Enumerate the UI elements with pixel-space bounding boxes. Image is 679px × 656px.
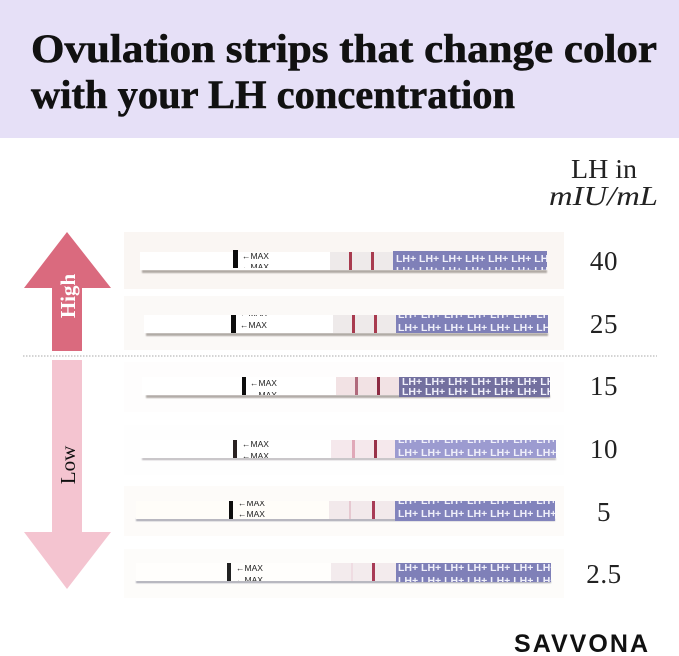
strip row: LH 5: LH+ LH+ LH+ LH+ LH+ LH+ LH+ LH+ [398, 508, 579, 520]
value: 5: 5 [597, 497, 611, 527]
strip row: LH 25 [144, 315, 550, 338]
value: 15: 15 [590, 371, 618, 401]
strip row: LH 15: ←MAX [250, 390, 277, 400]
title [31, 26, 657, 117]
column heading: LH in mIU/mL [549, 154, 658, 211]
value: 40: 40 [590, 246, 618, 276]
title: with your LH concentration [31, 72, 515, 117]
strip row: LH 10: ←MAX [242, 439, 269, 449]
arrow: low: Low [56, 445, 80, 484]
strip row: LH 10: LH+ LH+ LH+ LH+ LH+ LH+ LH+ LH+ [398, 447, 579, 459]
strip row: LH 25: ←MAX [240, 320, 267, 330]
strip row: LH 25: ←MAX [240, 308, 267, 318]
strip row: LH 10 [141, 440, 557, 461]
value: 25: 25 [590, 309, 618, 339]
strip row: LH 40 [124, 232, 564, 289]
strip row: LH 2.5: ←MAX [236, 563, 263, 573]
value: 10: 10 [590, 434, 618, 464]
column heading: LH in mIU/mL: mIU/mL [549, 181, 658, 211]
strip row: LH 2.5 [135, 563, 552, 584]
strip row: LH 40: LH+ LH+ LH+ LH+ LH+ LH+ LH+ [396, 253, 554, 265]
strip row: LH 25: LH+ LH+ LH+ LH+ LH+ LH+ LH+ [398, 309, 556, 321]
strip row: LH 15 [145, 377, 551, 399]
column heading: LH in mIU/mL: LH in [571, 154, 638, 184]
arrow: high: High [56, 274, 80, 318]
strip row: LH 5: ←MAX [238, 509, 265, 519]
strip row: LH 15: LH+ LH+ LH+ LH+ LH+ LH+ LH+ [402, 386, 560, 398]
strip row: LH 15: LH+ LH+ LH+ LH+ LH+ LH+ LH+ [402, 376, 560, 388]
title banner [0, 0, 679, 138]
arrow: high [24, 232, 111, 351]
strip row: LH 40: LH+ LH+ LH+ LH+ LH+ LH+ LH+ [396, 265, 554, 277]
strip row: LH 2.5: LH+ LH+ LH+ LH+ LH+ LH+ LH+ [398, 575, 556, 587]
strip row: LH 40: ←MAX [242, 262, 269, 272]
strip row: LH 10: LH+ LH+ LH+ LH+ LH+ LH+ LH+ LH+ [398, 434, 579, 446]
value: 2.5: 2.5 [586, 559, 622, 589]
title: Ovulation strips that change color [31, 26, 657, 71]
strip row: LH 10: ←MAX [242, 451, 269, 461]
strip row: LH 5: LH+ LH+ LH+ LH+ LH+ LH+ LH+ LH+ [398, 495, 579, 507]
strip row: LH 2.5: LH+ LH+ LH+ LH+ LH+ LH+ LH+ [398, 562, 556, 574]
strip row: LH 5 [135, 501, 556, 522]
strip row: LH 5: ←MAX [238, 498, 265, 508]
strip row: LH 15: ←MAX [250, 378, 277, 388]
strip row: LH 25: LH+ LH+ LH+ LH+ LH+ LH+ LH+ [398, 322, 556, 334]
strip row: LH 40: ←MAX [242, 251, 269, 261]
arrow: low [24, 360, 111, 589]
strip row: LH 2.5: ←MAX [236, 575, 263, 585]
